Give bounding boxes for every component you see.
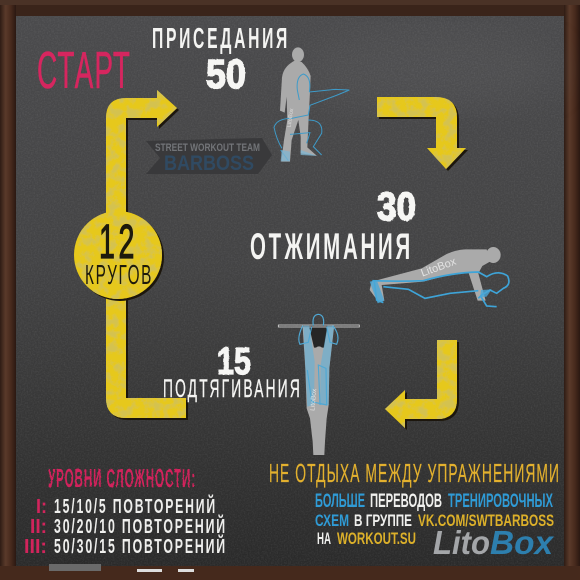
raised silhouette — [309, 328, 327, 348]
level 1 — [36, 494, 217, 518]
loop connector and rounds badge — [74, 211, 186, 418]
squat motion outline — [274, 74, 349, 161]
group promo text — [315, 491, 554, 548]
team logo — [146, 138, 272, 175]
figure: pull-up — [278, 314, 359, 455]
pull-up blue tint — [303, 326, 334, 407]
promo line 3: НА — [317, 529, 331, 548]
logo team line: STREET WORKOUT TEAM — [155, 142, 260, 154]
lower stem — [106, 290, 186, 418]
logo name: BARBOSS — [164, 152, 254, 175]
pull-up bar — [278, 325, 359, 327]
promo line 2 — [315, 511, 554, 530]
level 1: I: — [36, 496, 47, 518]
squat watermark: LitoBox — [287, 108, 295, 128]
difficulty levels: УРОВНИ СЛОЖНОСТИ: — [48, 463, 196, 493]
push-up motion outline — [372, 272, 509, 307]
level 3 — [24, 534, 227, 558]
LitoBox logo: Box — [490, 524, 555, 561]
chalk tray items — [49, 564, 194, 572]
difficulty levels — [24, 463, 227, 558]
level 1: 15/10/5 ПОВТОРЕНИЙ — [54, 494, 217, 518]
arrow: start up to squats — [106, 90, 177, 214]
logo banner — [146, 138, 272, 174]
promo line 2: СХЕМ — [315, 511, 349, 530]
squats count: 50 — [206, 51, 246, 97]
level 3: III: — [24, 536, 47, 558]
level 3: 50/30/15 ПОВТОРЕНИЙ — [54, 534, 227, 558]
pull-ups heading: ПОДТЯГИВАНИЯ — [163, 375, 302, 403]
pull-up body — [303, 328, 334, 455]
LitoBox logo: Lito — [433, 524, 490, 561]
promo line 1: ПЕРЕВОДОВ — [370, 491, 442, 512]
squats heading: ПРИСЕДАНИЯ — [152, 23, 290, 55]
promo line 3: WORKOUT.SU — [337, 529, 416, 548]
level 2: II: — [30, 516, 47, 538]
arrow: push-ups to pull-ups — [385, 340, 457, 428]
squat body — [292, 47, 304, 62]
promo line 3 — [317, 529, 416, 548]
rounds label: КРУГОВ — [85, 259, 153, 290]
pull-up motion outline — [299, 314, 338, 405]
level 2: 30/20/10 ПОВТОРЕНИЙ — [54, 514, 227, 538]
pull-ups count: 15 — [217, 341, 251, 383]
start label: СТАРТ — [37, 42, 131, 100]
LitoBox logo — [433, 524, 555, 561]
promo line 1 — [315, 491, 553, 512]
level 2 — [30, 514, 227, 538]
push-ups count: 30 — [377, 185, 416, 229]
pull-up watermark: LitoBox — [309, 388, 318, 411]
round count: 12 — [99, 216, 138, 269]
push-up body — [486, 247, 501, 263]
push-up watermark: LitoBox — [419, 256, 458, 279]
promo line 1: БОЛЬШЕ — [315, 491, 365, 512]
arrow: squats to push-ups — [377, 97, 466, 169]
push-ups heading: ОТЖИМАНИЯ — [250, 226, 413, 267]
figure: push-up — [370, 247, 509, 307]
badge circle — [74, 211, 162, 299]
figure: squat — [274, 47, 349, 162]
promo line 2: В ГРУППЕ — [354, 511, 412, 530]
